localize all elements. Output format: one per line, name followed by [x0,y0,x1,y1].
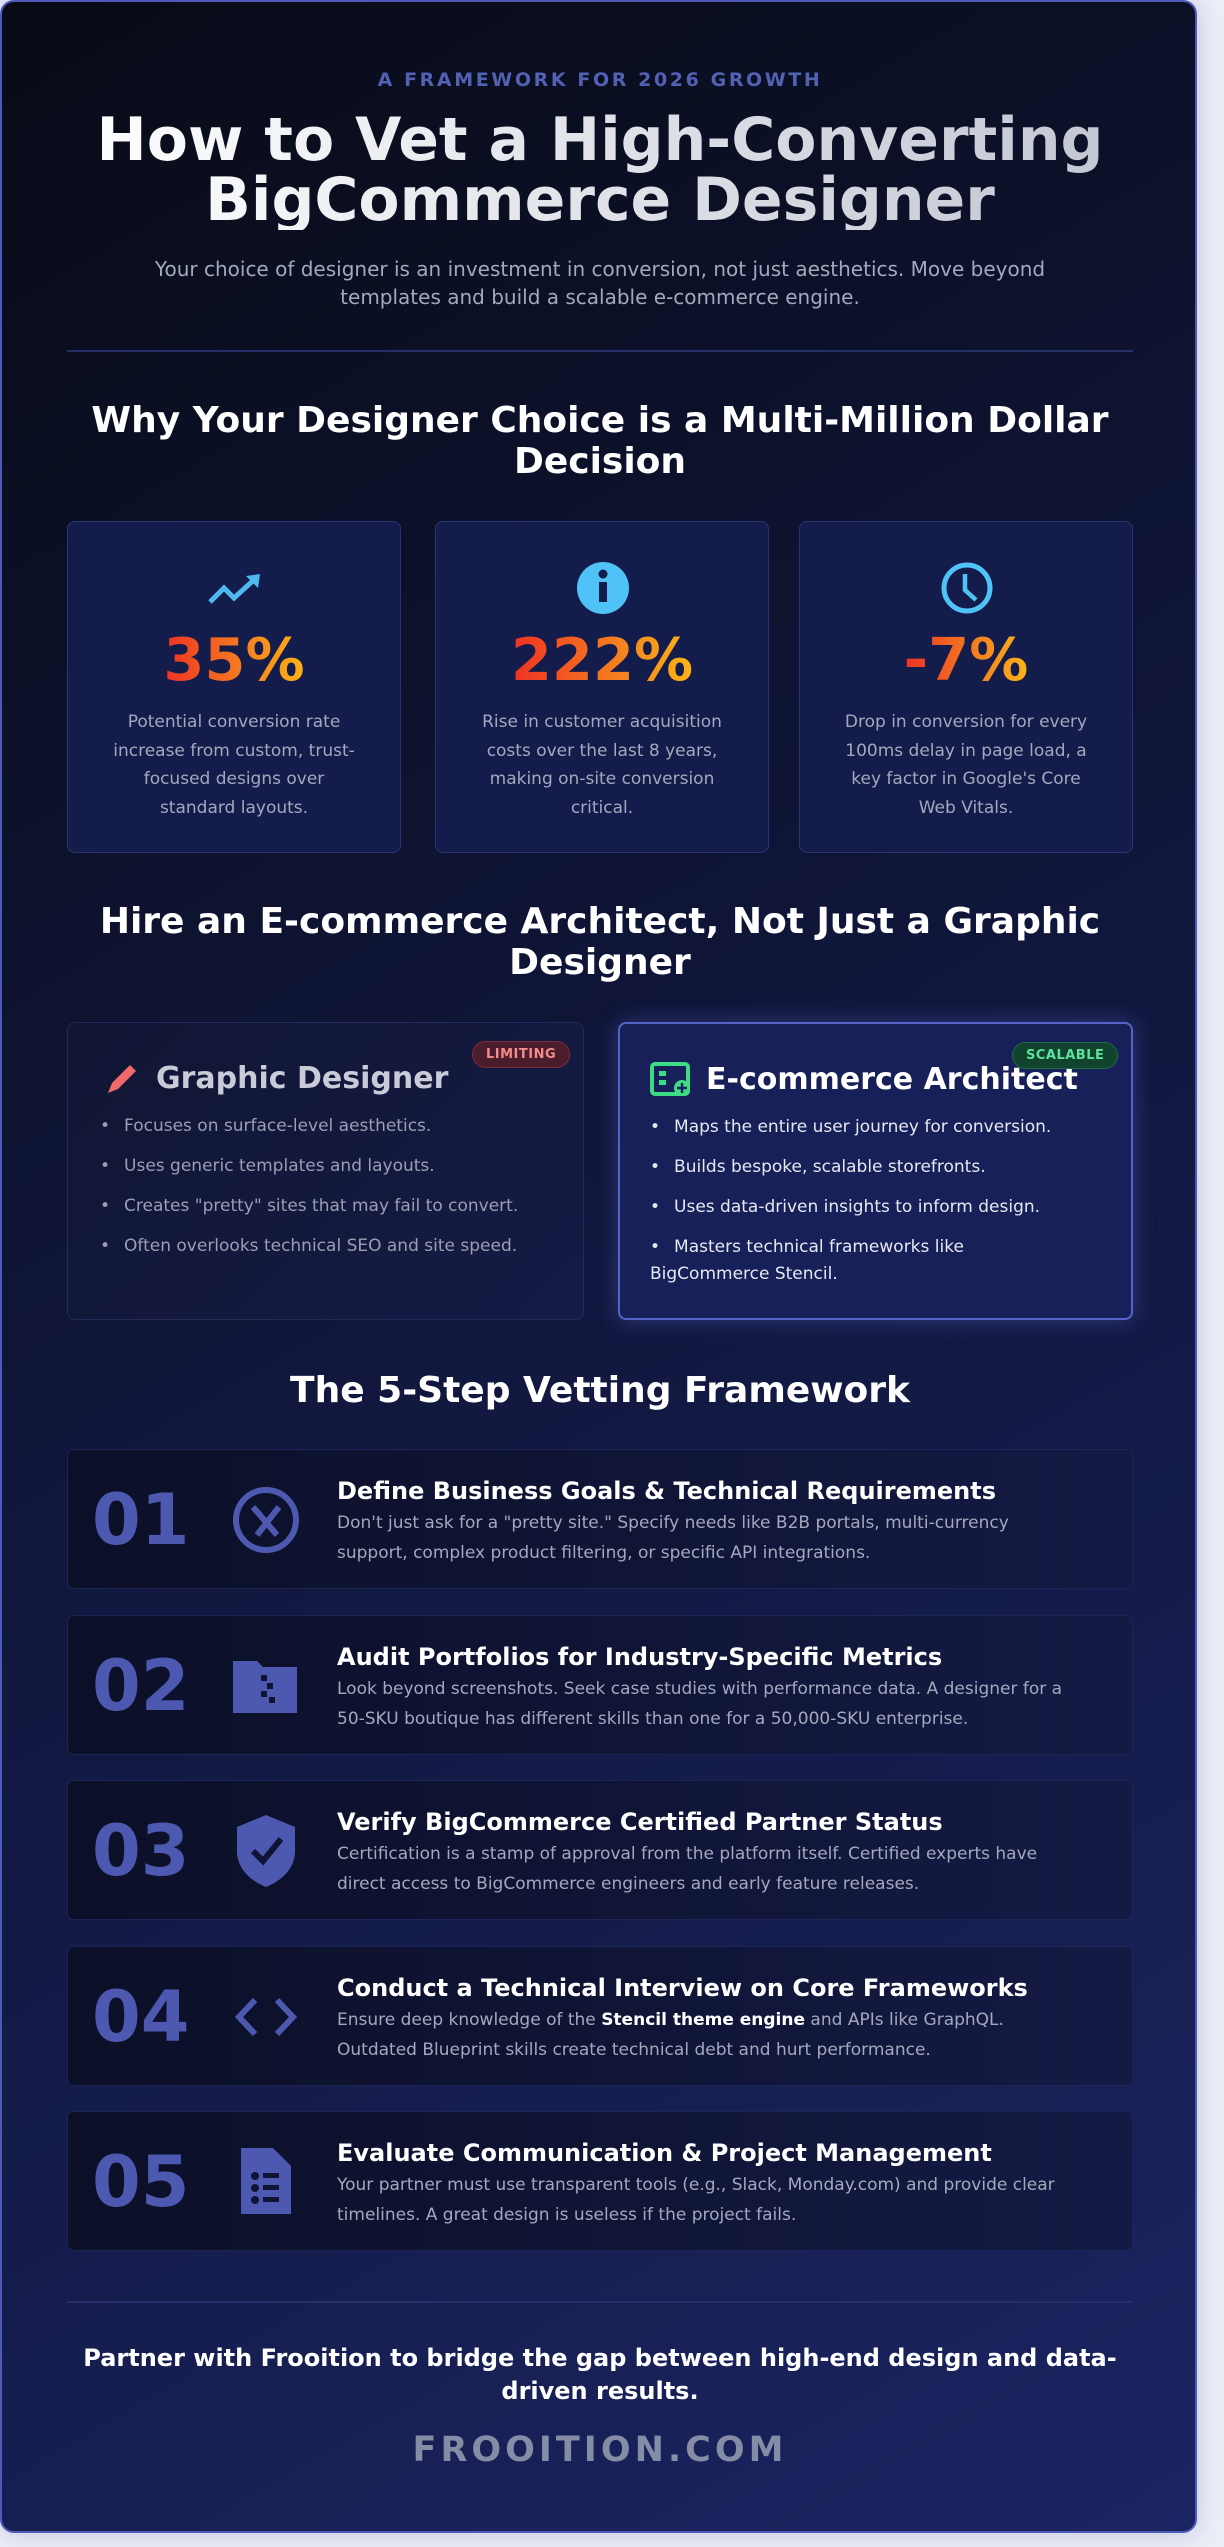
stat card 1 [67,521,401,853]
step 3: 03 [92,1810,189,1892]
title: How to Vet a High-Converting [97,105,1103,175]
icon: architect [650,1062,690,1096]
call to action: Partner with Frooition to bridge the gap between high-end design and data-driven results. [83,2344,1117,2405]
bullet list: Builds bespoke, scalable storefronts. [674,1157,986,1177]
step 2: 02 [92,1645,189,1727]
step 5 [67,2111,1133,2251]
heading: why [91,400,1109,482]
heading: hire [100,901,1100,983]
footer brand: FROOITION.COM [413,2430,787,2470]
bullet list: Creates "pretty" sites that may fail to convert. [124,1196,518,1216]
description: Rise in customer acquisition costs over the last 8 years, making on-site conversion critical. [482,712,722,818]
step 4: 04 [92,1976,189,2058]
icon: pencil [108,1065,136,1093]
bullet list: Uses generic templates and layouts. [124,1156,435,1176]
step 1 [67,1449,1133,1589]
heading: framework: The 5-Step Vetting Framework [290,1370,910,1411]
panel: e-commerce architect [618,1022,1133,1320]
heading: why: Why Your Designer Choice is a Multi-Million Dollar [91,400,1109,441]
number: 35% [163,625,305,694]
bullet list [102,1116,518,1256]
step 1: Define Business Goals & Technical Requirements [337,1477,996,1505]
step 2: Look beyond screenshots. Seek case studies with performance data. A designer for a 50-SKU boutique has different skills than one for a 50,000-SKU enterprise. [337,1679,1062,1729]
eyebrow: A FRAMEWORK FOR 2026 GROWTH [378,69,822,91]
heading: why: Decision [514,441,686,482]
number: -7% [904,625,1028,694]
heading: hire: Hire an E-commerce Architect, Not Just a Graphic [100,901,1100,942]
badge: limiting [472,1041,570,1068]
bullet list: Focuses on surface-level aesthetics. [124,1116,431,1136]
heading: Graphic Designer [156,1061,448,1096]
bullet list: Uses data-driven insights to inform design. [674,1197,1040,1217]
step 2 [67,1615,1133,1755]
step 5: 05 [92,2141,189,2223]
title [67,110,1133,230]
description: Potential conversion rate increase from custom, trust-focused designs over standard layouts. [113,712,355,818]
icon: shield [237,1815,295,1887]
heading: hire: Designer [509,942,691,983]
badge: scalable: SCALABLE [1026,1048,1104,1063]
bullet list [650,1117,1051,1284]
icon: document list [241,2148,291,2214]
badge: limiting: LIMITING [486,1047,556,1062]
badge: scalable [1012,1042,1118,1069]
step 4: Ensure deep knowledge of the Stencil theme engine and APIs like GraphQL. Outdated Blueprint skills create technical debt and hurt performance. [337,2010,1004,2060]
bullet list: Often overlooks technical SEO and site speed. [124,1236,517,1256]
subtitle: Your choice of designer is an investment in conversion, not just aesthetics. Move beyond [155,257,1045,281]
step 4: Conduct a Technical Interview on Core Frameworks [337,1974,1028,2002]
subtitle: templates and build a scalable e-commerce engine. [340,285,860,309]
step 2: Audit Portfolios for Industry-Specific Metrics [337,1643,942,1671]
icon: folder [233,1661,297,1713]
step 3 [67,1780,1133,1920]
subtitle [154,257,1045,309]
step 5: Your partner must use transparent tools (e.g., Slack, Monday.com) and provide clear timelines. A great design is useless if the project fails. [337,2175,1055,2225]
step 4 [67,1946,1133,2086]
icon: clock [942,562,992,614]
step 1: Don't just ask for a "pretty site." Specify needs like B2B portals, multi-currency support, complex product filtering, or specific API integrations. [337,1513,1009,1563]
description: Drop in conversion for every 100ms delay in page load, a key factor in Google's Core Web Vitals. [845,712,1087,818]
step 1: 01 [92,1479,189,1561]
bullet list: Masters technical frameworks like [674,1237,964,1257]
icon: code [235,1998,297,2036]
bullet list: BigCommerce Stencil. [650,1264,838,1284]
step 3: Certification is a stamp of approval from the platform itself. Certified experts have direct access to BigCommerce engineers and early feature releases. [337,1844,1037,1894]
panel: graphic designer [67,1022,584,1320]
heading: E-commerce Architect [706,1062,1078,1097]
stat card 2 [435,521,769,853]
stat card 3 [799,521,1133,853]
title: BigCommerce Designer [205,165,995,235]
number: 222% [511,625,693,694]
step 5: Evaluate Communication & Project Management [337,2139,992,2167]
step 3: Verify BigCommerce Certified Partner Status [337,1808,943,1836]
icon: target [233,1487,299,1553]
icon: info [577,562,629,614]
bullet list: Maps the entire user journey for conversion. [674,1117,1051,1137]
icon: trending up [208,574,260,604]
